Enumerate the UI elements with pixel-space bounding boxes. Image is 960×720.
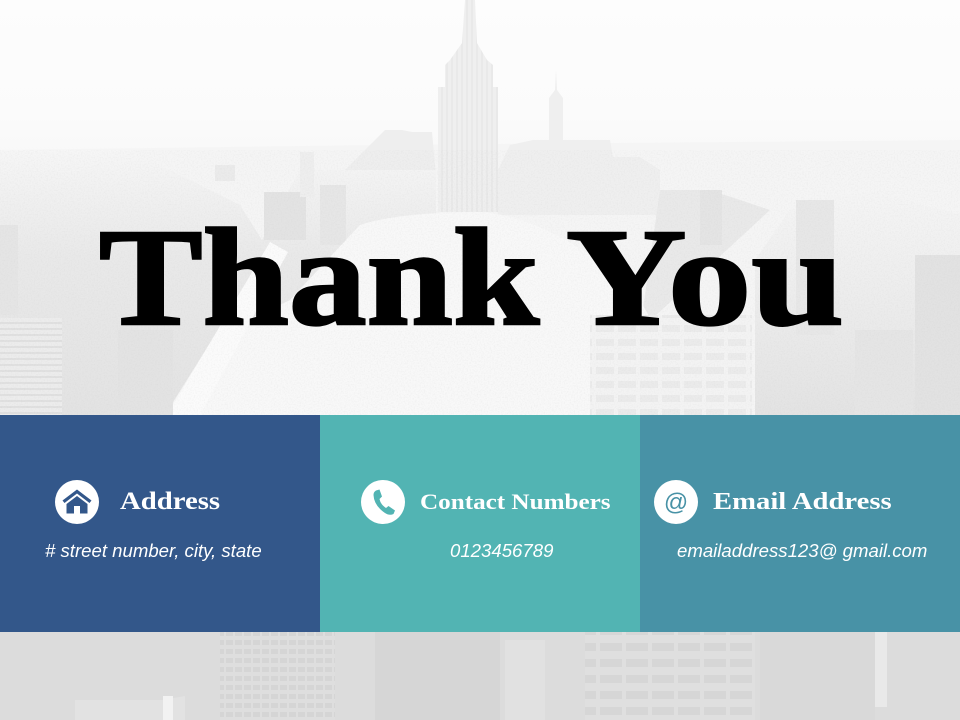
icon: house [55, 480, 99, 524]
text: email value: emailaddress123@ gmail.com [677, 540, 927, 561]
image grain [0, 150, 960, 415]
mid-right skyline and towers [640, 190, 770, 330]
bottom strip of city blocks [0, 632, 960, 720]
left foreground building [0, 318, 173, 415]
right city mass [755, 190, 960, 415]
panel: contact numbers [320, 415, 640, 632]
title: You [566, 201, 844, 355]
heading: email address: Email Address [713, 488, 892, 515]
text: phone number: 0123456789 [450, 540, 553, 561]
panel: email address [640, 415, 960, 632]
text: address value: # street number, city, state [45, 540, 262, 561]
heading: address: Address [120, 488, 220, 515]
panel: address [0, 415, 320, 632]
light windowed block at lower centre [590, 315, 752, 415]
distant skyline [0, 130, 960, 415]
icon: phone [361, 480, 405, 524]
icon: at sign: @ [664, 489, 688, 516]
heading: contact numbers: Contact Numbers [420, 489, 611, 514]
one world trade tower [549, 70, 563, 175]
empire state building [438, 0, 498, 212]
light curved overlay behind title [200, 212, 665, 415]
title: Thank [99, 200, 539, 354]
left city mass [0, 150, 436, 415]
diagonal light band [167, 242, 288, 415]
icon: at sign [654, 480, 698, 524]
